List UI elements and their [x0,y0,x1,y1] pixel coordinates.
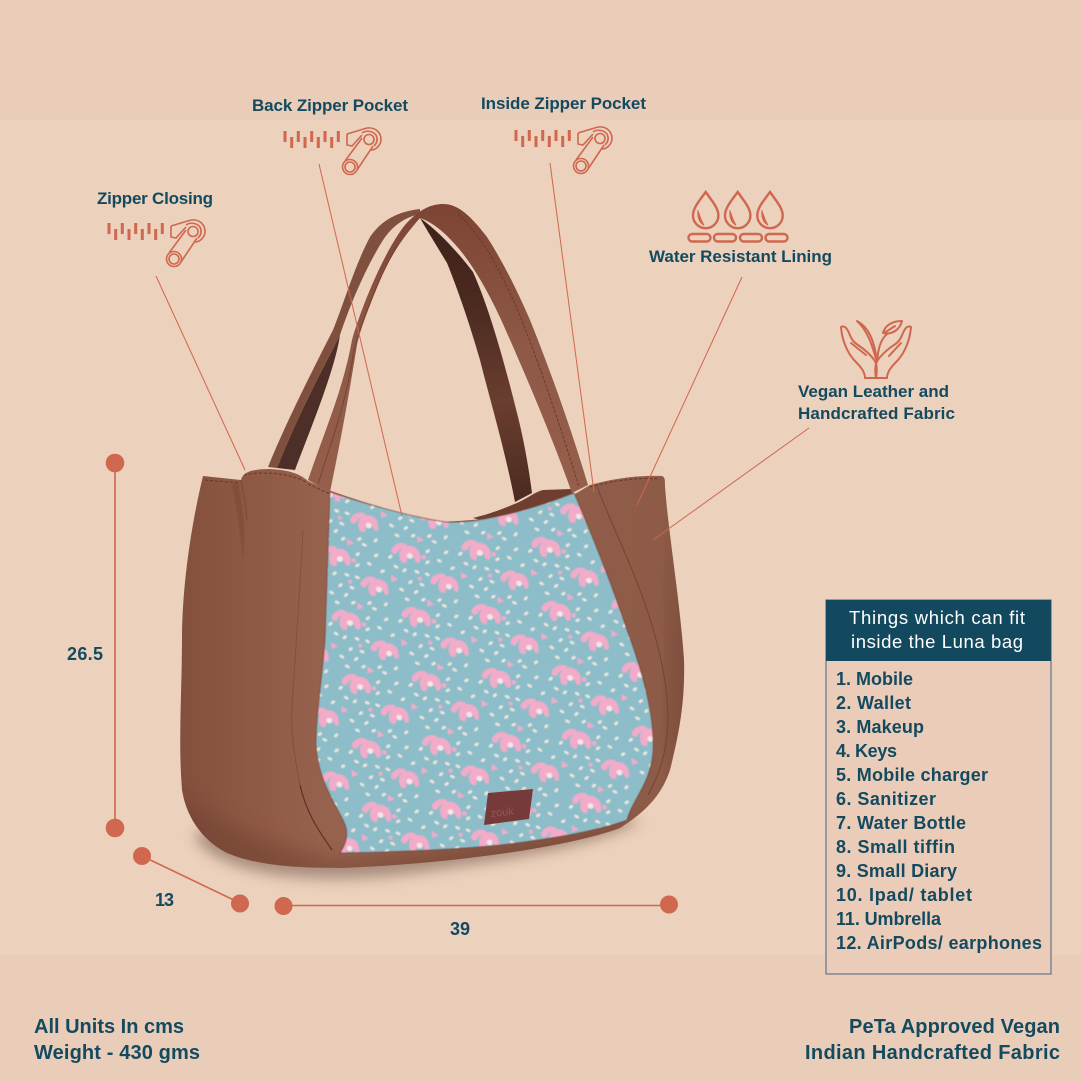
label patch [484,789,533,825]
list of items: 2. Wallet [836,693,911,713]
icon: zipper closing [109,220,205,266]
fold lines left [292,530,303,785]
fabric panel [316,492,653,853]
list of items: 3. Makeup [836,717,924,737]
bag illustration [170,204,700,880]
note: units and weight: All Units In cms [34,1016,184,1038]
label: Vegan Leather and Handcrafted Fabric: Handcrafted Fabric [798,404,955,423]
note: certification: Indian Handcrafted Fabric [805,1042,1060,1064]
label: Zipper Closing: Zipper Closing [97,189,213,208]
label: Back Zipper Pocket: Back Zipper Pocket [252,96,408,115]
list of items: 10. Ipad/ tablet [836,885,972,905]
dimension: width: 39 [450,919,470,939]
list of items: 11. Umbrella [836,909,942,929]
note: units and weight [34,1016,200,1064]
list of items: 9. Small Diary [836,861,957,881]
left fold shadow [232,482,244,560]
body shading [170,520,700,880]
icon: hands with plant [841,321,911,378]
leader lines [156,163,809,540]
dimension: depth [133,847,249,912]
back handle [268,209,532,502]
note: certification: PeTa Approved Vegan [849,1016,1060,1038]
icon: zipper back pocket [285,128,381,174]
note: units and weight: Weight - 430 gms [34,1042,200,1064]
panel header [826,600,1051,661]
leather body [180,469,684,868]
label: Vegan Leather and Handcrafted Fabric [798,382,955,423]
bag shadow [195,815,640,878]
label patch: zouk [490,806,515,820]
icon: water drops [688,192,788,242]
list of items: 1. Mobile [836,669,913,689]
list of items: 5. Mobile charger [836,765,988,785]
panel header: Things which can fit [849,607,1025,628]
list of items: 8. Small tiffin [836,837,955,857]
dimension: height [67,454,124,837]
seam stitching [205,473,660,494]
panel header: inside the Luna bag [851,631,1023,652]
dimension: width [274,896,678,939]
icon: zipper inside pocket [516,127,612,174]
label: Inside Zipper Pocket: Inside Zipper Pocket [481,94,646,113]
label: Water Resistant Lining: Water Resistant Lining [649,247,832,266]
right fold lines [597,486,668,795]
dimension: depth: 13 [155,890,174,910]
list of items: 4. Keys [836,741,897,761]
list of items: 6. Sanitizer [836,789,936,809]
panel: things which can fit [826,600,1051,974]
front handle [308,204,588,493]
list of items: 12. AirPods/ earphones [836,933,1042,953]
inner bag lining [473,489,576,520]
label: Vegan Leather and Handcrafted Fabric: Vegan Leather and [798,382,949,401]
list of items: 7. Water Bottle [836,813,966,833]
note: certification [805,1016,1060,1064]
dimension: height: 26.5 [67,644,103,664]
list of items [836,669,1042,953]
